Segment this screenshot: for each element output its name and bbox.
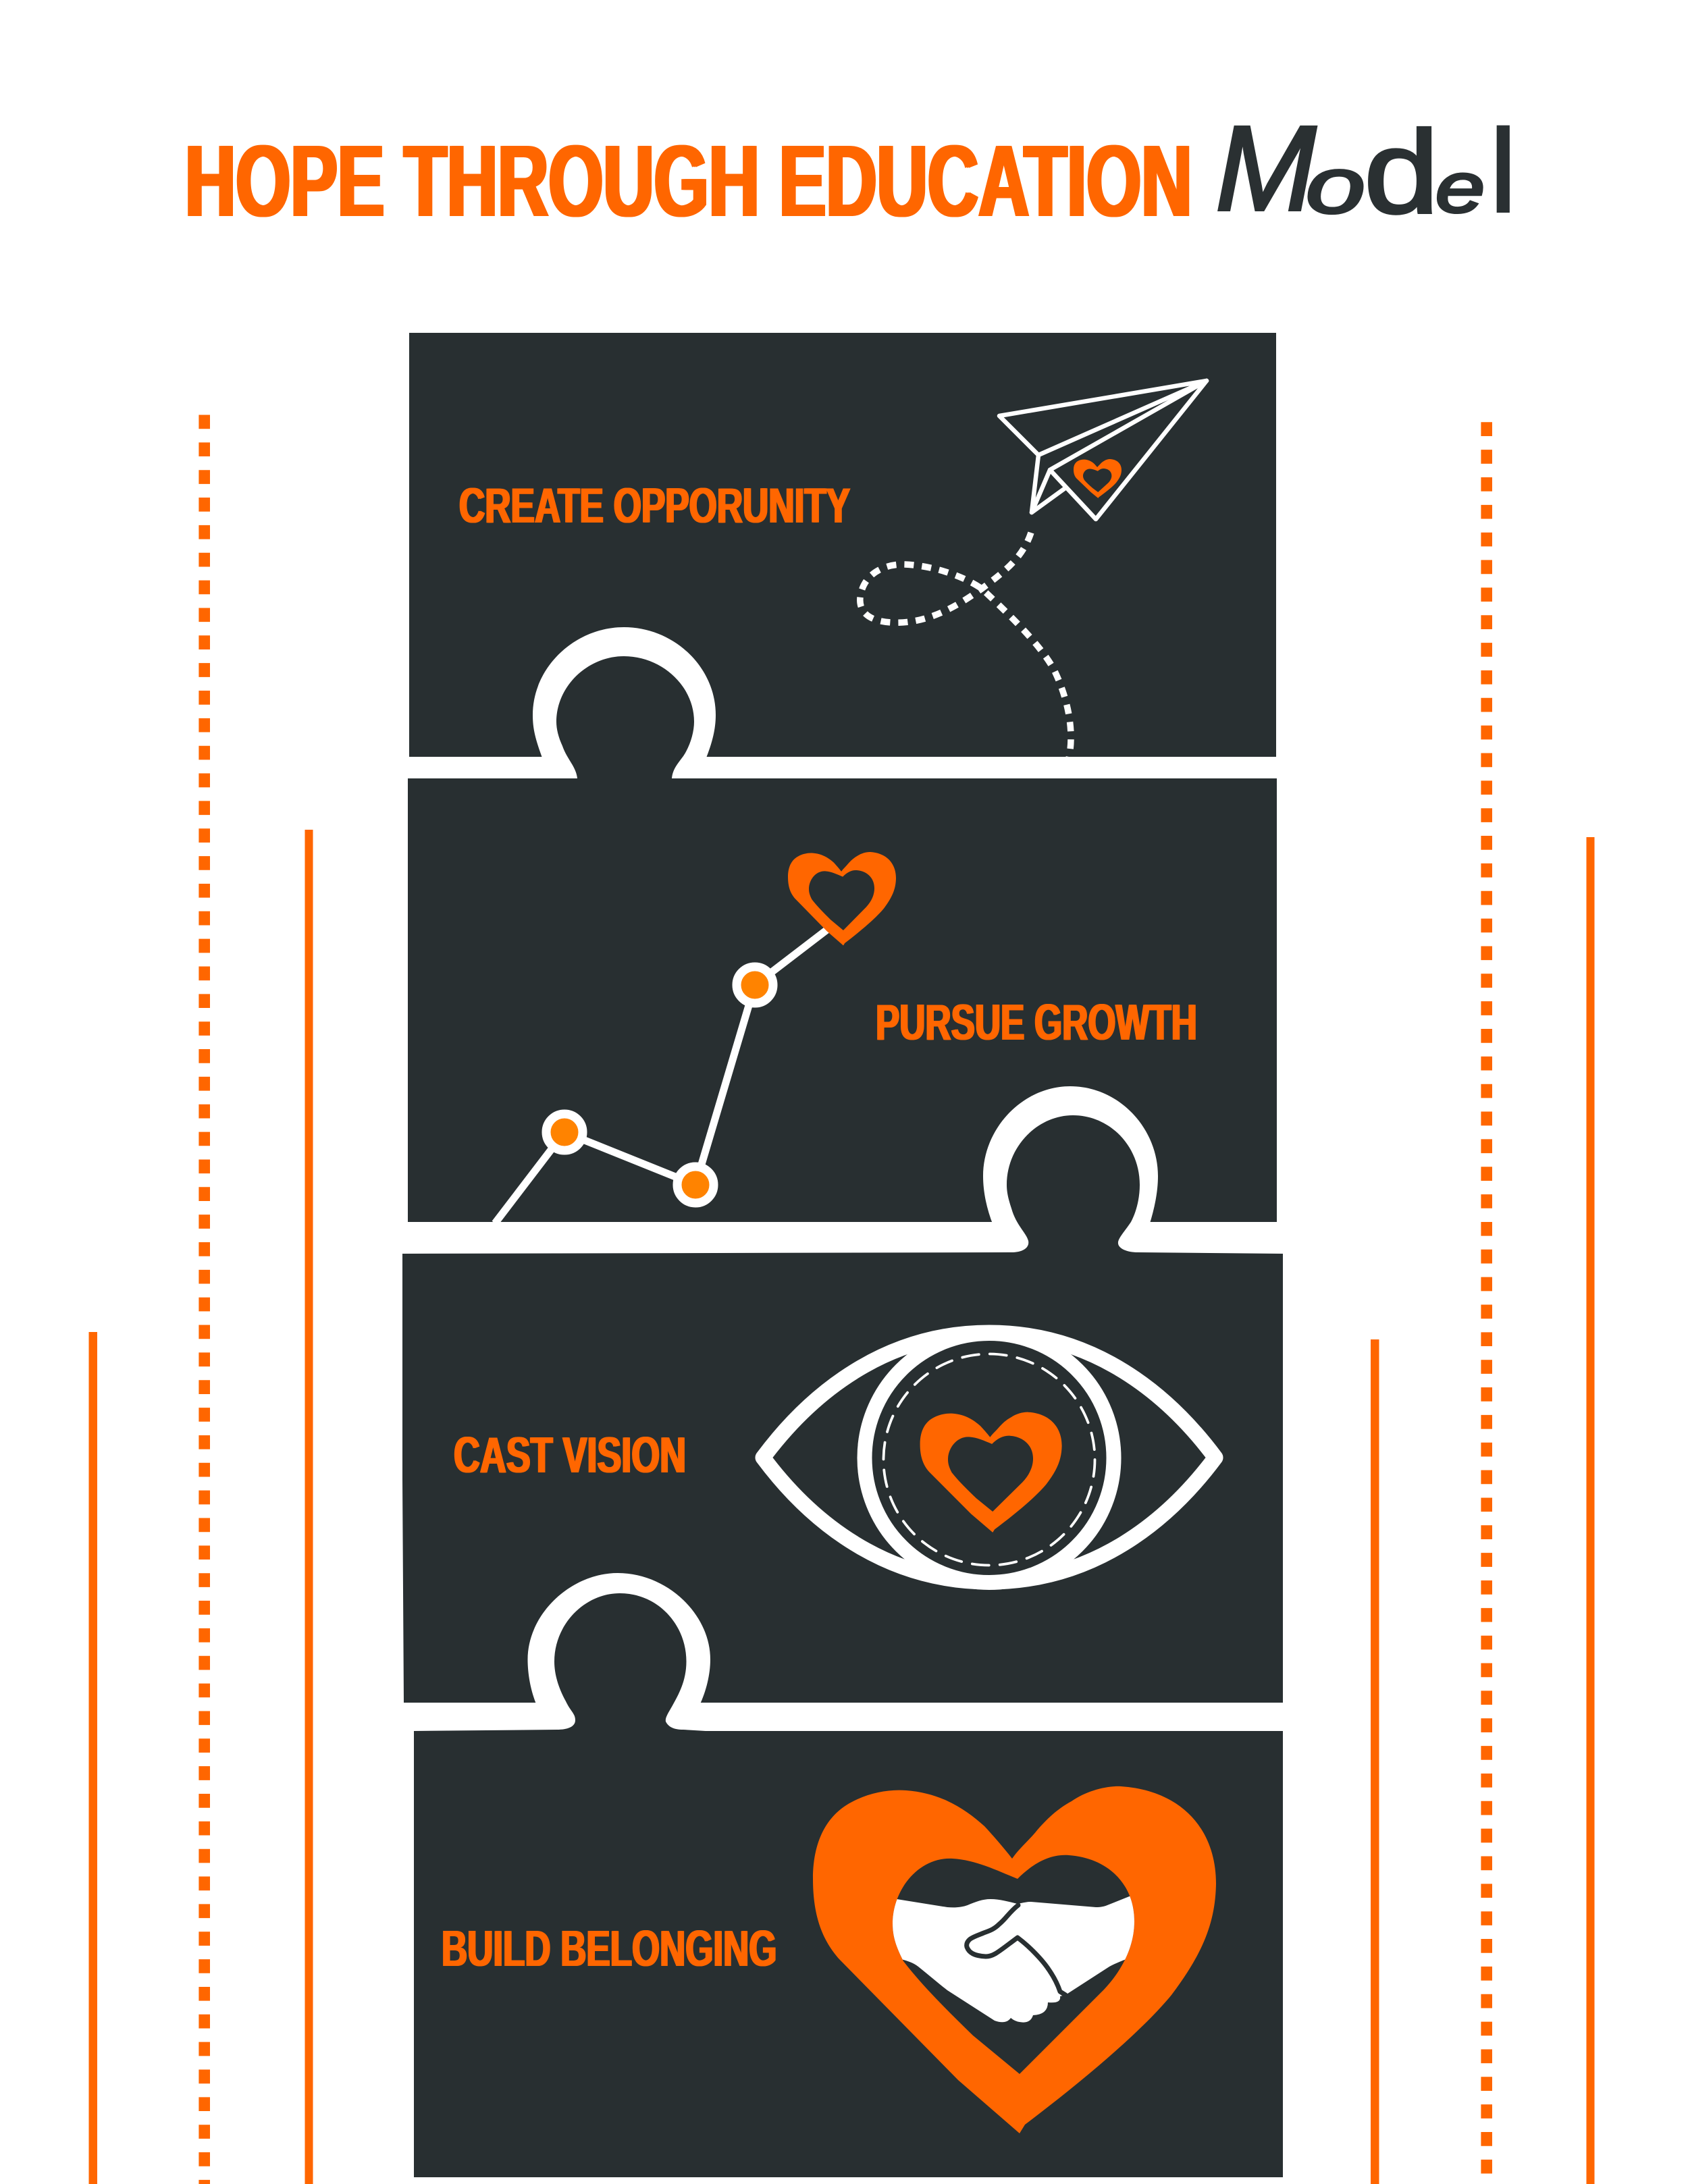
title script word: Model: o <box>1306 141 1365 230</box>
title script word: Model: M <box>1215 101 1316 236</box>
icon: eye with heart <box>763 1333 1215 1582</box>
label: create opporunity: CREATE OPPORUNITY <box>459 479 850 533</box>
panel: cast vision <box>402 1086 1283 1703</box>
label: cast vision: CAST VISION <box>454 1426 686 1483</box>
icon: paper plane with heart <box>999 381 1207 519</box>
title script word: Model <box>1215 101 1516 238</box>
title script word: Model: e <box>1435 149 1485 228</box>
icon: heart at chart peak <box>788 852 896 945</box>
title script word: Model: l <box>1490 105 1516 236</box>
label: pursue growth: PURSUE GROWTH <box>876 994 1197 1050</box>
panel: pursue growth <box>408 627 1277 1222</box>
label: build belonging: BUILD BELONGING <box>442 1920 776 1977</box>
icon: dashed flight trail <box>860 533 1071 758</box>
title: HOPE THROUGH EDUCATION <box>185 124 1192 238</box>
title script word: Model: d <box>1364 106 1439 238</box>
chart: rising line with nodes <box>495 930 827 1223</box>
icon: handshake <box>893 1896 1134 2023</box>
panel: build belonging <box>414 1573 1283 2177</box>
panel: create opportunity <box>409 333 1276 757</box>
icon: large heart <box>813 1786 1216 2133</box>
